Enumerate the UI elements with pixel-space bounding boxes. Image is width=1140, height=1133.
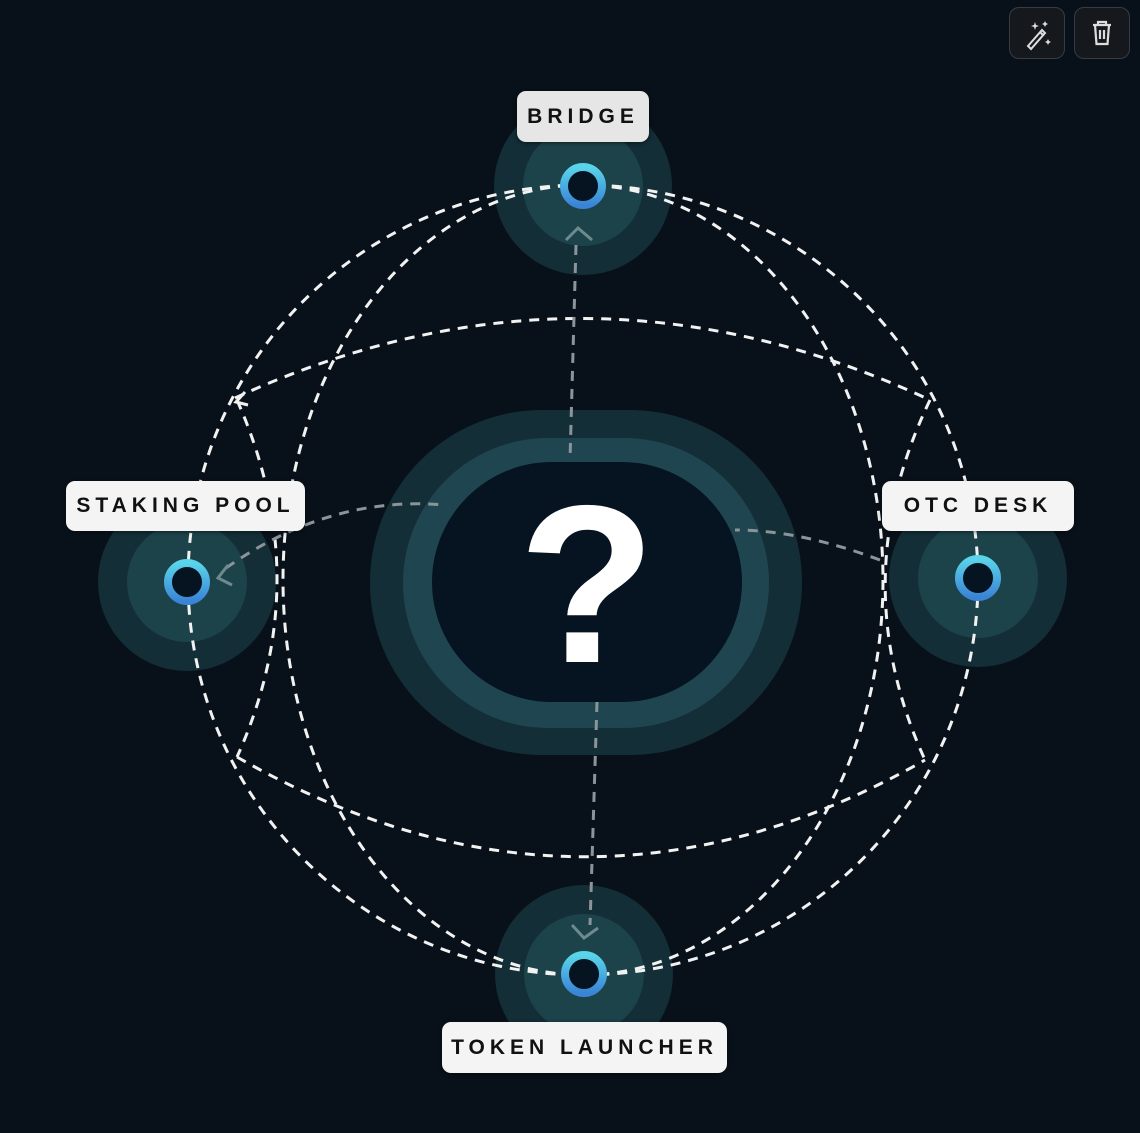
label: staking pool bbox=[66, 481, 305, 531]
label: bridge bbox=[517, 91, 649, 142]
label: bridge: BRIDGE bbox=[527, 104, 639, 128]
label: otc desk: OTC DESK bbox=[904, 494, 1052, 517]
label: otc desk bbox=[882, 481, 1074, 531]
node rings bbox=[168, 167, 997, 993]
label: staking pool: STAKING POOL bbox=[76, 494, 295, 517]
button: trash bbox=[1074, 7, 1130, 59]
dashed connection lines bbox=[188, 185, 978, 975]
label: token launcher bbox=[442, 1022, 727, 1073]
node halos bbox=[98, 97, 1067, 1063]
center hub bbox=[370, 410, 802, 755]
label: token launcher: TOKEN LAUNCHER bbox=[451, 1036, 718, 1058]
button: magic wand bbox=[1009, 7, 1065, 59]
center hub: ? bbox=[518, 458, 656, 710]
gray spokes bbox=[218, 228, 880, 938]
